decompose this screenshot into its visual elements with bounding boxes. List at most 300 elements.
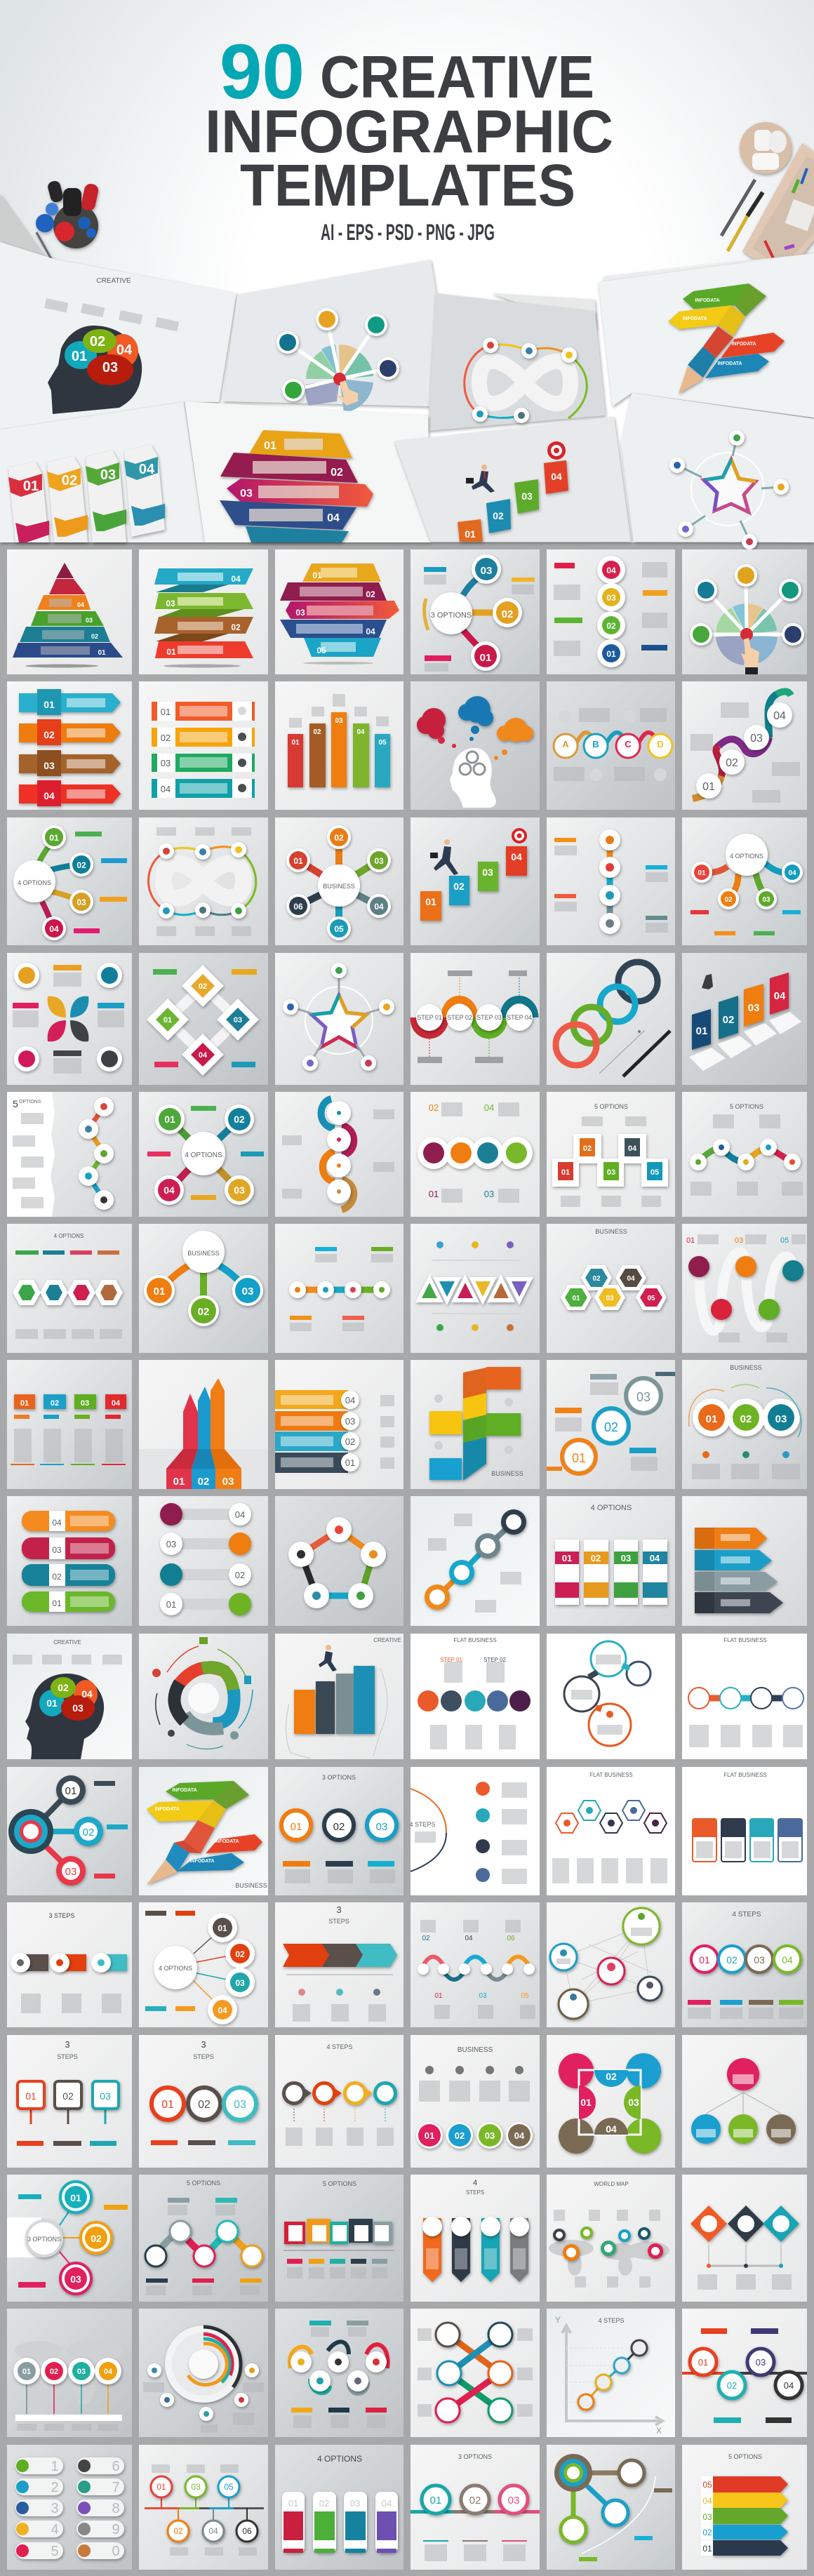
template 37: ribbon tags and columns [7,1360,132,1489]
template 83: growth chart [547,2309,675,2437]
template 12: s-curve steps: 01 [702,781,715,793]
template 55: big ring network [7,1767,132,1895]
template 84: timeline rings: 02 [727,2380,737,2391]
template 67: square steps with arrows: STEPS [57,2053,78,2060]
template 15: six step business hub: 06 [293,902,303,912]
template 64: curved wave six: 01 [434,1992,443,2000]
panel: career steps sheet: 03 [521,490,533,502]
template 11: twisted options: C [625,739,632,749]
template 34: triangle row [411,1224,540,1353]
template 2: folded ribbon [139,549,268,674]
template 20: diamonds weave: 04 [199,1051,208,1060]
template 54: flat chain: FLAT BUSINESS [723,1637,767,1643]
template 90: five layered arrows: 01 [702,2544,712,2554]
template 85: numbered pills: 3 [51,2501,59,2516]
template 46: diagonal chain [411,1496,540,1626]
template 56: arrow pencil: INFODATA [172,1788,197,1793]
template 31: hexagon row [7,1224,132,1353]
template 19: four petals [7,953,132,1085]
running businessman [466,465,495,493]
template 7: step arrows [7,681,132,810]
template 3: hexagon stack: 01 [312,570,322,580]
template 25: torn paper options [7,1092,132,1217]
template 85: numbered pills: 6 [112,2459,120,2474]
template 12: s-curve steps: 03 [750,733,763,745]
template 67: square steps with arrows: 3 [65,2039,70,2050]
template 4: three options hub [411,549,540,674]
template 66: four rings with labels: 4 STEPS [732,1911,761,1918]
template 18: four options top hub: 02 [724,896,733,904]
template 15: six step business hub: 03 [374,856,384,866]
template 18: four options top hub: 04 [788,869,796,877]
template 4: three options hub: 01 [480,652,491,664]
template 39: title bars [275,1360,403,1489]
template 20: diamonds weave: 01 [164,1016,172,1025]
template 2: folded ribbon: 02 [231,622,241,632]
template 39: title bars: 01 [345,1457,355,1468]
template 43: coloured pills: 04 [52,1518,62,1528]
template 83: growth chart: X [656,2426,662,2436]
title: 90 [220,29,305,115]
template 80: concentric circle chart [139,2309,268,2437]
template 32: business hub three: 01 [154,1286,165,1297]
template 13: four options hub: 04 [49,924,59,934]
template 11: twisted options: B [592,739,599,749]
template 90: five layered arrows: 05 [702,2480,712,2490]
template 35: hexagon cluster: 05 [647,1295,655,1302]
template 49: brain head: CREATIVE [53,1639,81,1646]
icon: grey and yellow pens [721,180,763,251]
panel: hexagon layers sheet [185,401,431,542]
template 9: bar columns: 03 [335,717,343,725]
template 90: five layered arrows: 02 [702,2528,712,2537]
template 36: winding path [682,1224,807,1353]
template 85: numbered pills: 8 [112,2501,120,2516]
template 83: growth chart: Y [555,2315,561,2325]
template 25: torn paper options: OPTIONS [19,1100,41,1105]
template 28: four circles row: 04 [484,1102,494,1113]
template 49: brain head: 02 [58,1682,69,1693]
panel: four boxes sheet: 03 [100,467,116,483]
template 73: three options ring network: 02 [91,2233,102,2244]
template 50: ribbon knot [139,1634,268,1759]
panel: pointer pie sheet [223,260,454,413]
template 73: three options ring network: 01 [70,2192,81,2203]
template 51: book bars and runner [275,1634,403,1759]
template 58: four steps arc: 4 STEPS [409,1821,436,1828]
panel: pencil sheet: INFODATA [682,316,707,321]
template 88: three rings on timeline [411,2445,540,2570]
subtitle: file formats: AI - EPS - PSD - PNG - JPG [321,220,495,245]
template 43: coloured pills: 03 [52,1545,62,1555]
panel: hexagon layers sheet: 04 [327,512,340,524]
template 4: three options hub: 02 [502,608,513,620]
template 88: three rings on timeline: 03 [508,2495,519,2507]
template 42: three circles loop [682,1360,807,1489]
template 38: upward arrows [139,1360,268,1489]
template 67: square steps with arrows: 02 [62,2090,74,2102]
template 15: six step business hub: 05 [334,924,344,934]
template 62: big circle with nodes: 4 OPTIONS [159,1965,192,1972]
template 37: ribbon tags and columns: 02 [51,1399,59,1408]
template 42: three circles loop: 02 [740,1413,752,1425]
template 84: timeline rings: 01 [698,2357,708,2368]
template 5: vertical steps [547,549,675,674]
template 13: four options hub [7,817,132,945]
template 90: five layered arrows: 5 OPTIONS [728,2453,762,2460]
template 75: five square boxes: 5 OPTIONS [323,2180,356,2187]
template 24: skewed panels: 01 [696,1025,707,1037]
template 4: three options hub: 03 [481,565,492,577]
template 24: skewed panels: 03 [748,1002,759,1014]
template 16: staircase runner: 01 [425,896,436,907]
template 66: four rings with labels: 04 [782,1954,793,1966]
template 73: three options ring network: 3 OPTIONS [27,2236,61,2243]
template 22: step wave: STEP 02 [447,1014,472,1021]
template 7: step arrows: 04 [44,790,55,801]
template 24: skewed panels: 02 [723,1014,734,1026]
template 13: four options hub: 03 [76,897,86,907]
template 45: pentagon ring [275,1496,403,1626]
template 48: layered arrows [682,1496,807,1626]
template 30: wave of five: 5 OPTIONS [730,1103,763,1110]
template 64: curved wave six: 03 [479,1992,487,2000]
panel: career steps sheet: 02 [493,510,504,521]
head silhouette with brain lobes: 04 [116,342,133,358]
template 33: horizontal chain [275,1224,403,1353]
template 57: three rings with tags: 02 [333,1821,345,1833]
head silhouette with brain lobes: 03 [102,360,118,375]
template 13: four options hub: 02 [76,860,86,870]
template 76: four pointed banners: 4 [473,2179,477,2187]
template 42: three circles loop: 01 [706,1413,717,1425]
template 85: numbered pills: 9 [112,2522,120,2537]
template 35: hexagon cluster [547,1224,675,1353]
template 85: numbered pills: 4 [51,2522,59,2537]
template 47: box columns: 03 [621,1553,631,1563]
template 44: grey bars and badges: 04 [235,1509,245,1520]
template 10: thinking head with clouds [411,681,540,810]
template 79: map circles with legs: 01 [22,2368,31,2376]
template 86: timeline six rings [139,2445,268,2570]
head silhouette with brain lobes [48,326,142,414]
template 89: ring network [547,2445,675,2570]
template 86: timeline six rings: 03 [191,2482,201,2492]
panel: career steps sheet: 04 [551,471,562,482]
template 18: four options top hub: 01 [698,869,706,877]
template 67: square steps with arrows: 03 [100,2090,111,2102]
template 73: three options ring network [7,2175,132,2302]
template 8: option bands: 03 [161,758,171,768]
panel: career steps sheet: 01 [465,528,476,540]
template 28: four circles row: 02 [429,1102,439,1113]
template 84: timeline rings [682,2309,807,2437]
template 40: stepped ribbon column: BUSINESS [491,1470,523,1477]
panel: four boxes sheet: 04 [139,462,155,477]
template 2: folded ribbon: 01 [166,647,176,657]
template 60: flat cards [682,1767,807,1895]
template 87: four cylinders: 4 OPTIONS [317,2454,362,2464]
template 68: three arrow rings: 3 [201,2039,206,2050]
template 12: s-curve steps: 04 [773,710,786,722]
template 35: hexagon cluster: BUSINESS [595,1228,627,1235]
template 36: winding path: 05 [780,1236,789,1245]
template 63: chevrons: STEPS [328,1918,349,1925]
template 22: step wave: STEP 01 [417,1014,442,1021]
template 79: map circles with legs: 04 [104,2368,113,2376]
template 63: chevrons [275,1902,403,2027]
panel: four boxes sheet: 01 [23,479,39,494]
template 41: climbing rings: 01 [572,1451,586,1465]
template 1: pyramid [7,549,132,674]
template 81: five rings [275,2309,403,2437]
template 72: tree of circles [682,2035,807,2168]
template 8: option bands: 02 [161,733,171,743]
panel: four boxes sheet: 02 [62,473,77,488]
template 26: four options centre: 01 [164,1114,175,1125]
template 15: six step business hub: 01 [293,856,303,866]
template 47: box columns: 01 [562,1553,572,1563]
template 2: folded ribbon: 03 [166,599,175,608]
template 7: step arrows: 01 [44,699,55,710]
template 76: four pointed banners [411,2175,540,2302]
template 39: title bars: 02 [345,1436,355,1447]
template 44: grey bars and badges: 01 [166,1599,176,1610]
template 70: flat four circles with icons: 01 [425,2130,434,2141]
icon: bowl of erasers [740,122,792,174]
template 79: map circles with legs [7,2309,132,2437]
title: TEMPLATES [240,152,575,218]
template 68: three arrow rings: 03 [234,2099,246,2111]
template 52: flat five circles: STEP 01 [440,1657,462,1663]
template 84: timeline rings: 03 [756,2357,766,2368]
template 67: square steps with arrows: 01 [25,2090,36,2102]
template 71: square ring of half circles: 04 [606,2123,617,2135]
template 86: timeline six rings: 01 [156,2482,166,2492]
template 29: square steps [547,1092,675,1217]
template 56: arrow pencil: INFODATA [214,1839,239,1844]
template 15: six step business hub: BUSINESS [323,883,355,890]
template 47: box columns: 4 OPTIONS [591,1504,632,1512]
pencil arrows [668,283,785,394]
template 53: flat linked bubbles [547,1634,675,1759]
template 18: four options top hub [682,817,807,945]
template 65: network bubbles [547,1902,675,2027]
template 3: hexagon stack: 04 [366,627,375,636]
template 87: four cylinders [275,2445,403,2570]
template 71: square ring of half circles [547,2035,675,2168]
template 12: s-curve steps [682,681,807,810]
template 64: curved wave six: 02 [422,1935,430,1942]
template 20: diamonds weave [139,953,268,1085]
panel: hexagon layers sheet: 02 [331,467,343,479]
template 11: twisted options [547,681,675,810]
template 57: three rings with tags [275,1767,403,1895]
template 1: pyramid: 02 [91,633,98,640]
template 5: vertical steps: 04 [606,566,616,575]
template 66: four rings with labels: 01 [699,1954,710,1966]
template 16: staircase runner [411,817,540,945]
template 32: business hub three: BUSINESS [187,1250,220,1257]
template 28: four circles row [411,1092,540,1217]
panel: infinity sheet [428,293,606,431]
template 8: option bands [139,681,268,810]
template 69: teardrop rings [275,2035,403,2168]
panel: career steps sheet [394,417,631,542]
template 47: box columns: 04 [650,1553,660,1563]
template 62: big circle with nodes [139,1902,268,2027]
template 47: box columns [547,1496,675,1626]
template 20: diamonds weave: 03 [234,1016,242,1025]
template 23: linked rings and pen [547,953,675,1085]
template 52: flat five circles [411,1634,540,1759]
panel: pencil sheet [599,253,814,418]
template 28: four circles row: 01 [429,1189,439,1199]
template 3: hexagon stack: 02 [366,589,375,599]
template 38: upward arrows: 02 [198,1476,209,1488]
template 79: map circles with legs: 02 [50,2368,58,2376]
template 78: three diamonds [682,2175,807,2302]
template 56: arrow pencil: BUSINESS [235,1882,267,1889]
template 26: four options centre: 4 OPTIONS [185,1152,222,1159]
template 64: curved wave six: 04 [465,1935,473,1942]
template 35: hexagon cluster: 04 [627,1275,635,1283]
template 32: business hub three: 03 [242,1286,253,1297]
template 71: square ring of half circles: 01 [580,2097,592,2108]
template 83: growth chart: 4 STEPS [598,2317,625,2324]
template 35: hexagon cluster: 01 [572,1295,580,1302]
template 39: title bars: 03 [345,1416,355,1427]
template 87: four cylinders: 03 [350,2498,360,2509]
template 85: numbered pills: 1 [51,2459,59,2474]
template 41: climbing rings: 02 [604,1420,618,1434]
template 76: four pointed banners: STEPS [466,2189,484,2196]
template 79: map circles with legs: 03 [77,2368,86,2376]
template 57: three rings with tags: 01 [291,1821,302,1833]
template 58: four steps arc [409,1767,540,1895]
template 13: four options hub: 01 [49,833,59,843]
template 9: bar columns: 02 [313,728,321,736]
template 36: winding path: 03 [735,1236,743,1245]
template 30: wave of five [682,1092,807,1217]
template 20: diamonds weave: 02 [199,982,207,991]
template 87: four cylinders: 04 [382,2498,392,2509]
hero background [0,0,814,542]
template 66: four rings with labels: 03 [754,1954,765,1966]
template 49: brain head: 04 [81,1688,93,1700]
template 70: flat four circles with icons [411,2035,540,2168]
panel: brain sheet [0,242,236,429]
template 9: bar columns: 04 [356,728,365,736]
template 70: flat four circles with icons: 04 [514,2130,525,2141]
icon: pen cup [36,180,100,248]
template 41: climbing rings [547,1360,675,1489]
head silhouette with brain lobes: 01 [72,349,87,364]
template 43: coloured pills [7,1496,132,1626]
template 37: ribbon tags and columns: 03 [81,1399,89,1408]
template 77: world map pins [547,2175,675,2302]
title: INFOGRAPHIC [205,98,613,166]
template 32: business hub three: 02 [198,1306,209,1318]
template 15: six step business hub: 02 [334,833,344,843]
template 44: grey bars and badges [139,1496,268,1626]
template 7: step arrows: 03 [44,760,55,771]
template 1: pyramid: 03 [86,617,93,624]
template 63: chevrons: 3 [336,1904,342,1915]
template 86: timeline six rings: 02 [173,2526,183,2536]
template 1: pyramid: 04 [77,601,84,608]
template 42: three circles loop: BUSINESS [730,1364,762,1371]
template 70: flat four circles with icons: BUSINESS [458,2046,493,2054]
template 28: four circles row: 03 [484,1189,494,1199]
panel: pencil sheet: INFODATA [731,342,756,347]
template 54: flat chain [682,1634,807,1759]
template 16: staircase runner: 02 [453,881,465,892]
template 70: flat four circles with icons: 02 [455,2130,465,2141]
template 85: numbered pills: 7 [112,2480,120,2495]
title [205,29,613,218]
template 90: five layered arrows: 04 [702,2496,712,2506]
template 68: three arrow rings: 02 [198,2099,211,2111]
template 68: three arrow rings: 01 [161,2099,174,2111]
panel: pencil sheet: INFODATA [717,361,742,366]
template 74: wave five options [139,2175,268,2302]
template 51: book bars and runner: CREATIVE [373,1637,401,1643]
template 67: square steps with arrows [7,2035,132,2168]
template 39: title bars: 04 [345,1395,355,1406]
template 35: hexagon cluster: 03 [606,1295,614,1302]
template 18: four options top hub: 03 [762,896,770,904]
template 26: four options centre [139,1092,268,1217]
template 64: curved wave six [411,1902,540,2027]
template 86: timeline six rings: 06 [242,2526,252,2536]
template 16: staircase runner: 04 [511,851,522,862]
template 11: twisted options: D [657,739,664,749]
template 27: vertical ribbon chain [275,1092,403,1217]
template 29: square steps: 5 OPTIONS [594,1103,628,1110]
icon: notebook and pen [0,194,70,300]
icon: wooden tray [742,143,814,279]
template 84: timeline rings: 04 [784,2380,794,2391]
template 71: square ring of half circles: 03 [628,2097,639,2108]
template 90: five layered arrows: 03 [702,2512,712,2522]
template 40: stepped ribbon column [411,1360,540,1489]
template 37: ribbon tags and columns: 01 [20,1399,29,1408]
template 9: bar columns [275,681,403,810]
template 43: coloured pills: 01 [52,1599,62,1608]
template 86: timeline six rings: 04 [208,2526,218,2536]
panel: four boxes sheet [0,402,205,542]
template 59: flat hexagon outlines: FLAT BUSINESS [589,1772,633,1778]
template 88: three rings on timeline: 01 [430,2495,441,2507]
template 56: arrow pencil: INFODATA [189,1859,215,1864]
template 60: flat cards: FLAT BUSINESS [723,1772,767,1778]
template 38: upward arrows: 01 [173,1476,185,1488]
template 16: staircase runner: 03 [482,867,493,878]
template 64: curved wave six: 06 [507,1935,515,1942]
template 29: square steps: 05 [650,1168,659,1177]
panel: pencil sheet: INFODATA [695,298,720,303]
template 49: brain head [7,1634,132,1759]
template 62: big circle with nodes: 02 [235,1949,245,1959]
template 26: four options centre: 03 [234,1184,245,1196]
template 37: ribbon tags and columns: 04 [112,1399,121,1408]
template 85: numbered pills: 5 [51,2544,59,2559]
template 87: four cylinders: 01 [288,2498,298,2509]
template 73: three options ring network: 03 [70,2274,81,2285]
template 43: coloured pills: 02 [52,1572,62,1582]
template 66: four rings with labels [682,1902,807,2027]
